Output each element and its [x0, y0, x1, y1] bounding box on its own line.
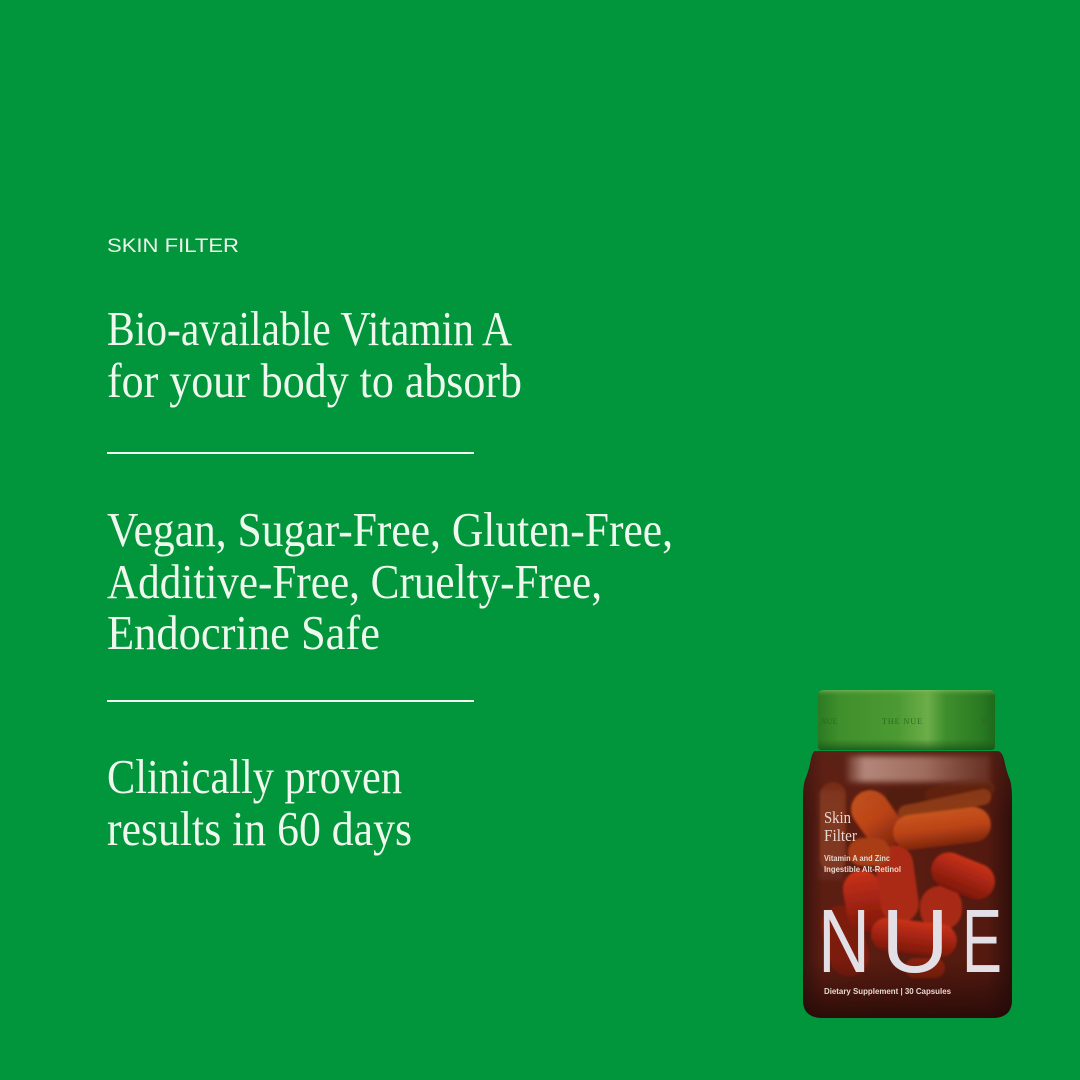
bottle body [803, 750, 1012, 1018]
heading: bio-available vitamin A [107, 301, 522, 408]
bottle label text: Skin [824, 808, 851, 827]
heading: bio-available vitamin A: for your body to absorb [107, 353, 522, 408]
text block: free-from claims: Endocrine Safe [107, 605, 380, 660]
capsules [816, 778, 1000, 981]
text block: free-from claims: Additive-Free, Cruelty-Free, [107, 554, 602, 609]
bottle cap: THE [980, 717, 996, 726]
bottle label text: Filter [824, 826, 857, 845]
text block: free-from claims [107, 502, 673, 660]
bottle label text: U [881, 892, 949, 992]
text block: clinically proven: Clinically proven [107, 749, 402, 804]
text block: free-from claims: Vegan, Sugar-Free, Gluten-Free, [107, 502, 673, 557]
bottle cap [818, 690, 996, 750]
bottle label text [818, 808, 1002, 996]
text block: clinically proven [107, 749, 412, 856]
bottle label text: Dietary Supplement | 30 Capsules [824, 986, 951, 996]
label: skin filter: SKIN FILTER [107, 235, 239, 257]
text block: clinically proven: results in 60 days [107, 801, 412, 856]
bottle label text: Vitamin A and Zinc [824, 853, 890, 863]
bottle cap: THE NUE [882, 717, 923, 726]
product: NUE bottle [803, 690, 1012, 1018]
bottle label text: N [818, 892, 870, 992]
bottle label text: E [962, 892, 1002, 992]
bottle cap: NUE [821, 717, 838, 726]
bottle label text: Ingestible Alt-Retinol [824, 864, 901, 874]
heading: bio-available vitamin A: Bio-available Vitamin A [107, 301, 513, 356]
